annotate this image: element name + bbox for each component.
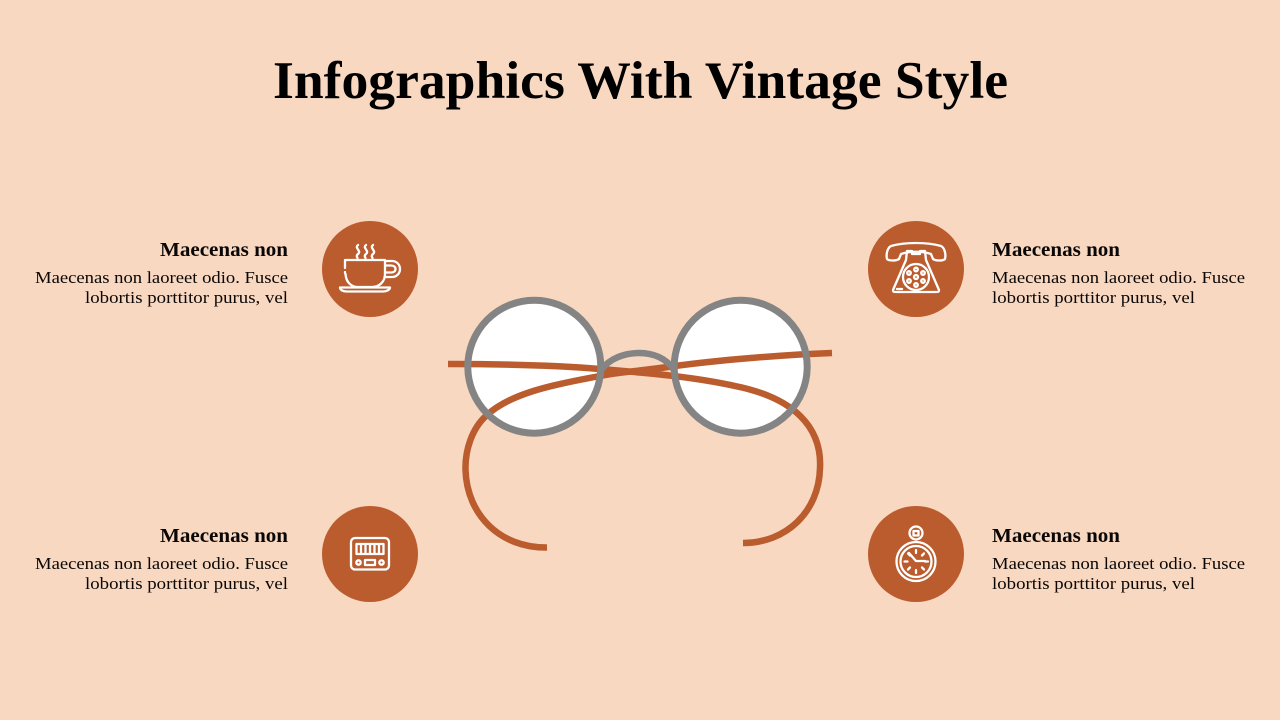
- lens: right: [674, 300, 807, 433]
- body text: lobortis porttitor purus, vel: [992, 288, 1195, 307]
- frame: bridge: [601, 353, 674, 370]
- heading: Maecenas non: [992, 525, 1120, 547]
- item: bottom left: [35, 506, 418, 602]
- body text: [35, 268, 288, 307]
- body text: [992, 554, 1245, 593]
- temple arm: right-starting: [465, 353, 832, 548]
- icon: coffee cup: [322, 221, 418, 317]
- body text: Maecenas non laoreet odio. Fusce: [992, 554, 1245, 573]
- title: Infographics With Vintage Style: [273, 52, 1008, 110]
- lens: left: [468, 300, 601, 433]
- body text: lobortis porttitor purus, vel: [992, 574, 1195, 593]
- body text: Maecenas non laoreet odio. Fusce: [35, 554, 288, 573]
- item: top right: [868, 221, 1245, 317]
- icon: radio: [322, 506, 418, 602]
- body text: lobortis porttitor purus, vel: [85, 574, 288, 593]
- body text: [992, 268, 1245, 307]
- temple arm: left-starting: [448, 364, 820, 543]
- body text: Maecenas non laoreet odio. Fusce: [35, 268, 288, 287]
- icon: rotary telephone: [868, 221, 964, 317]
- heading: Maecenas non: [160, 239, 288, 261]
- frame: left rim: [468, 300, 601, 433]
- frame: right rim: [674, 300, 807, 433]
- heading: Maecenas non: [992, 239, 1120, 261]
- item: bottom right: [868, 506, 1245, 602]
- icon: pocket watch: [868, 506, 964, 602]
- body text: lobortis porttitor purus, vel: [85, 288, 288, 307]
- body text: Maecenas non laoreet odio. Fusce: [992, 268, 1245, 287]
- heading: Maecenas non: [160, 525, 288, 547]
- glasses illustration: [448, 300, 832, 548]
- body text: [35, 554, 288, 593]
- item: top left: [35, 221, 418, 317]
